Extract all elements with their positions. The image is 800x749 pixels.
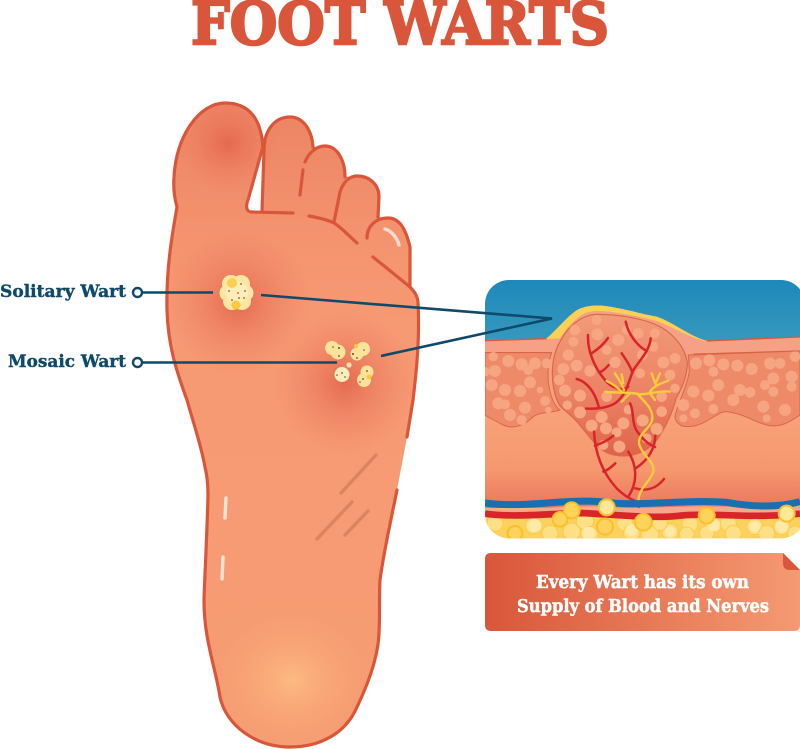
callout text (517, 573, 769, 617)
foot fill (167, 103, 419, 747)
fat layer (485, 499, 800, 543)
page fold (783, 553, 800, 570)
white gap between toes (246, 152, 263, 212)
wart body (552, 314, 687, 456)
label: solitary wart (0, 282, 213, 302)
skin glows (184, 116, 398, 718)
label: mosaic wart (8, 352, 337, 372)
foot outline (167, 103, 419, 747)
left dermis (480, 352, 560, 427)
label: solitary wart: Solitary Wart (0, 282, 126, 302)
large fat globules (508, 499, 795, 541)
callout text: Supply of Blood and Nerves (517, 597, 769, 617)
deep skin layer (485, 305, 800, 508)
surface layer (485, 305, 800, 355)
foot illustration (164, 91, 419, 749)
skin cross-section panel (480, 280, 800, 543)
mosaic warts (325, 341, 374, 387)
sky background (485, 280, 800, 340)
solitary wart (220, 275, 254, 310)
pointer lines to cross-section (261, 295, 552, 356)
nail highlight (385, 229, 399, 245)
red artery (485, 513, 800, 517)
nerves (605, 373, 670, 502)
callout banner (485, 553, 800, 631)
label: mosaic wart: Mosaic Wart (8, 352, 126, 372)
scars (317, 455, 376, 539)
blood vessels (577, 322, 664, 515)
blue vein (485, 501, 800, 506)
sole highlights (222, 498, 226, 579)
callout text: Every Wart has its own (536, 573, 749, 593)
callus cap (546, 305, 708, 342)
right dermis (675, 351, 800, 427)
